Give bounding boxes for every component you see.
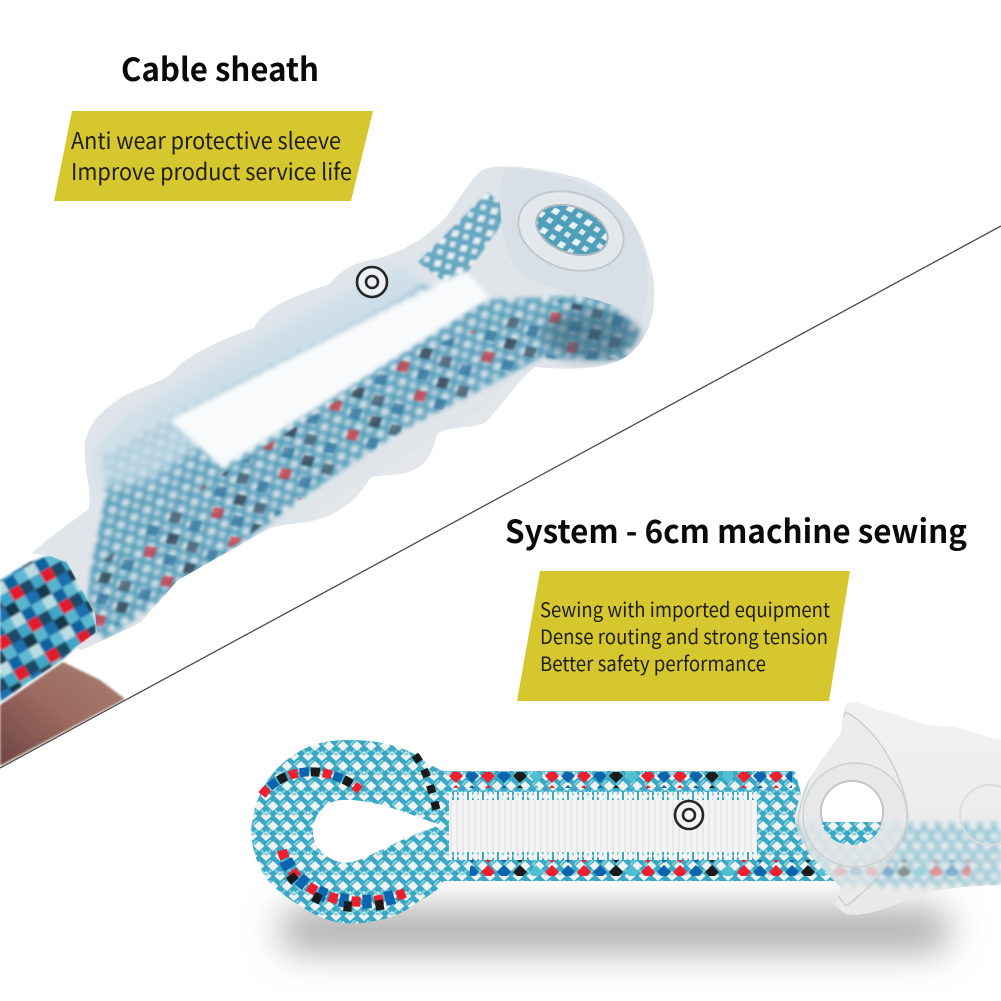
loop colored track: lower	[282, 850, 405, 907]
stitching teeth bottom	[449, 850, 757, 860]
photo: rope inside transparent sheath	[31, 166, 654, 650]
rope through sheath	[790, 822, 1001, 888]
callout: sewing benefits: Sewing with imported equipment	[540, 594, 830, 623]
photo: exposed rope end	[0, 555, 96, 702]
eye plate	[798, 712, 908, 906]
photo: finger	[0, 662, 125, 766]
shadow under lower rope	[280, 908, 950, 952]
second eye ring	[960, 785, 1001, 845]
callout: cable sheath benefits	[54, 111, 373, 201]
eye ring	[517, 190, 624, 272]
loop colored track: upper left	[262, 772, 360, 795]
eye opening	[820, 780, 884, 828]
sheath frost	[795, 800, 1001, 890]
photo: transparent sheath on lower rope	[790, 700, 1001, 920]
bottom colored diamonds	[470, 860, 825, 876]
diagonal divider	[0, 226, 1001, 768]
callout: cable sheath benefits: Anti wear protective sleeve	[71, 122, 341, 156]
main rope strand	[85, 285, 640, 640]
sheath body	[31, 166, 654, 650]
callout: sewing benefits: Dense routing and strong tension	[540, 621, 828, 650]
stitching	[449, 800, 757, 852]
icon: target marker on sheath	[357, 267, 387, 297]
rope loop and band	[251, 740, 840, 923]
loop colored track: neck	[415, 755, 438, 815]
icon: target marker on stitching	[675, 801, 703, 829]
upper strand	[417, 191, 502, 282]
back rope haze	[95, 265, 430, 490]
dark rope end	[542, 311, 638, 359]
heading: cable sheath: Cable sheath	[121, 45, 319, 91]
callout: cable sheath benefits: Improve product service life	[71, 153, 352, 187]
callout: sewing benefits	[517, 571, 850, 701]
lower haze	[120, 372, 540, 640]
eye plate	[500, 202, 635, 306]
sheath base	[795, 798, 1001, 915]
photo: rope with eye loop	[251, 740, 840, 923]
stitching through sheath	[170, 270, 490, 468]
colored rope flecks	[95, 300, 640, 640]
stitching teeth top	[449, 792, 757, 802]
eye opening rope	[535, 204, 609, 256]
colored flecks through sheath	[820, 860, 970, 876]
heading: machine sewing: System - 6cm machine sewing	[505, 507, 967, 553]
eye ring	[803, 763, 907, 867]
rope in opening	[822, 822, 881, 845]
callout: sewing benefits: Better safety performance	[540, 648, 766, 677]
top colored diamonds	[447, 772, 792, 788]
